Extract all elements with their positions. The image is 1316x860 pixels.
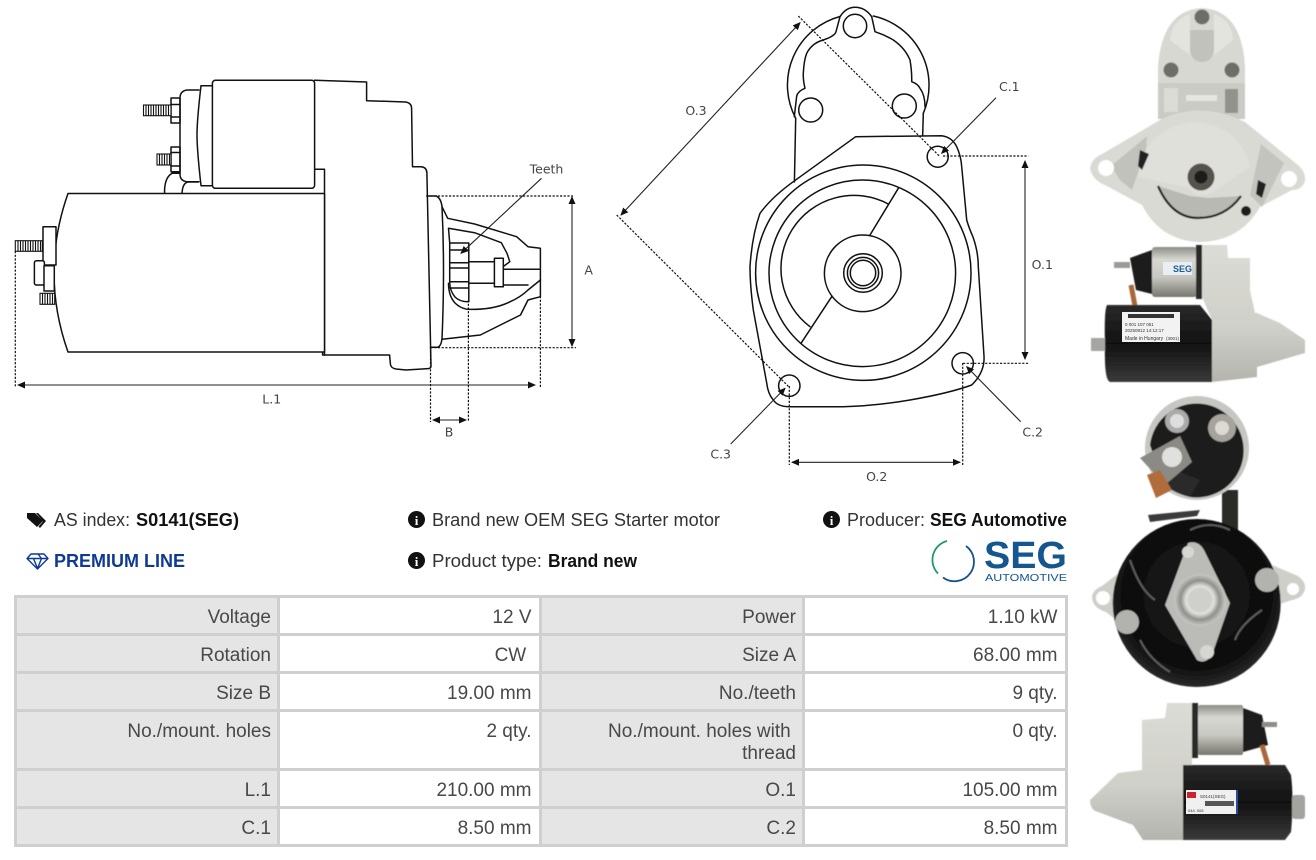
icon: info (823, 511, 840, 528)
callout C.3 (710, 388, 785, 462)
icon: info (408, 511, 425, 528)
row: C.1 and C.2: 8.50 mm (458, 818, 532, 839)
row: mounting holes: No./mount. holes with (608, 721, 791, 742)
product label: Made in Hungary (1125, 336, 1164, 342)
callout C.2: C.2 (1022, 424, 1043, 440)
row: L.1 and O.1 (17, 771, 1058, 806)
photo: front of starter (1090, 8, 1305, 242)
solenoid terminals (144, 98, 180, 172)
AS index line: S0141(SEG) (136, 510, 239, 530)
dimension B (430, 300, 468, 440)
dimension O.3 (617, 16, 939, 387)
row: mounting holes: 0 qty. (1012, 721, 1058, 742)
SEG sticker: SEG (1173, 264, 1192, 274)
icon: tags (27, 513, 46, 528)
row: size B and teeth: 19.00 mm (447, 683, 532, 704)
solenoid and drive housing outline (165, 80, 431, 370)
mounting flange (750, 136, 984, 407)
solenoid mount with lugs (787, 7, 929, 182)
producer line (823, 510, 1067, 530)
row: mounting holes: 2 qty. (486, 721, 532, 742)
description line: Brand new OEM SEG Starter motor (432, 510, 720, 530)
row: size B and teeth: No./teeth (719, 683, 796, 704)
photo: side view with SEG sticker (1091, 245, 1305, 382)
dimension A (430, 196, 593, 348)
SEG Automotive logo (932, 535, 1067, 584)
product type line: Product type: (432, 551, 542, 571)
producer line: Producer: (847, 510, 925, 530)
row: voltage and power (17, 598, 1058, 844)
premium line badge: PREMIUM LINE (54, 551, 185, 571)
dimension A: A (584, 262, 593, 278)
dimension O.1 (943, 156, 1053, 363)
row: rotation and size A: Size A (742, 645, 796, 666)
callout C.2 (967, 367, 1043, 440)
SEG Automotive logo: AUTOMOTIVE (985, 573, 1067, 584)
row: rotation and size A: 68.00 mm (973, 645, 1058, 666)
row: L.1 and O.1: 105.00 mm (962, 780, 1058, 801)
row: size B and teeth (17, 674, 1058, 709)
row: rotation and size A: CW (495, 645, 526, 666)
row: L.1 and O.1: L.1 (245, 780, 271, 801)
SEG Automotive logo: SEG (984, 535, 1067, 577)
icon: info: i (415, 513, 419, 528)
mounting holes (779, 146, 973, 396)
row: C.1 and C.2: 8.50 mm (984, 818, 1058, 839)
AS index line (27, 510, 239, 530)
drive nose (427, 196, 540, 347)
row: L.1 and O.1: 210.00 mm (436, 780, 532, 801)
AS label (1186, 790, 1238, 814)
product label (1122, 312, 1180, 342)
motor end studs (15, 227, 56, 304)
product label: (3001) (1166, 336, 1180, 341)
callout C.1 (942, 79, 1020, 153)
motor body (54, 194, 324, 352)
callout C.3: C.3 (710, 446, 731, 462)
row: voltage and power: 1.10 kW (988, 607, 1058, 628)
AS index line: AS index: (54, 510, 130, 530)
product type line: Brand new (548, 551, 638, 571)
product label: 0 001 107 051 (1125, 322, 1154, 327)
photo: rear of starter (1092, 396, 1305, 687)
icon: diamond (27, 554, 48, 569)
row: rotation and size A (17, 636, 1058, 671)
dimension L.1: L.1 (262, 392, 281, 406)
producer line: SEG Automotive (930, 510, 1067, 530)
product type line (408, 551, 638, 571)
icon: info: i (415, 554, 419, 569)
front circles and pinion hub (756, 165, 971, 380)
row: size B and teeth: 9 qty. (1012, 683, 1058, 704)
teeth callout: Teeth (529, 162, 563, 176)
AS label: S0141(SEG) (1200, 794, 1226, 799)
dimension O.2 (789, 363, 963, 484)
icon: info (408, 552, 425, 569)
row: voltage and power: Voltage (208, 607, 271, 628)
row: C.1 and C.2: C.2 (766, 818, 796, 839)
dimension L.1 (15, 251, 540, 406)
callout C.1: C.1 (999, 79, 1020, 94)
product label: 20250812 14:12:17 (1125, 328, 1164, 333)
photo: mirrored side view with AS label (1090, 703, 1305, 840)
dimension B: B (445, 424, 453, 440)
icon: info: i (830, 513, 834, 528)
specifications table (14, 595, 1068, 847)
dimension O.2: O.2 (866, 469, 887, 484)
row: size B and teeth: Size B (216, 683, 271, 704)
dimension O.3: O.3 (685, 103, 707, 118)
row: mounting holes (17, 712, 1058, 768)
row: voltage and power: 12 V (492, 607, 532, 628)
row: mounting holes: No./mount. holes (127, 721, 271, 742)
AS label: 04/L 008 (1188, 808, 1204, 813)
row: rotation and size A: Rotation (200, 645, 271, 666)
teeth callout (461, 162, 563, 253)
row: L.1 and O.1: O.1 (765, 780, 796, 801)
row: C.1 and C.2: C.1 (241, 818, 271, 839)
SEG sticker (1163, 262, 1192, 275)
row: mounting holes: thread (742, 743, 796, 764)
dimension O.1: O.1 (1032, 257, 1053, 272)
row: voltage and power: Power (742, 607, 796, 628)
row: C.1 and C.2 (17, 809, 1058, 844)
